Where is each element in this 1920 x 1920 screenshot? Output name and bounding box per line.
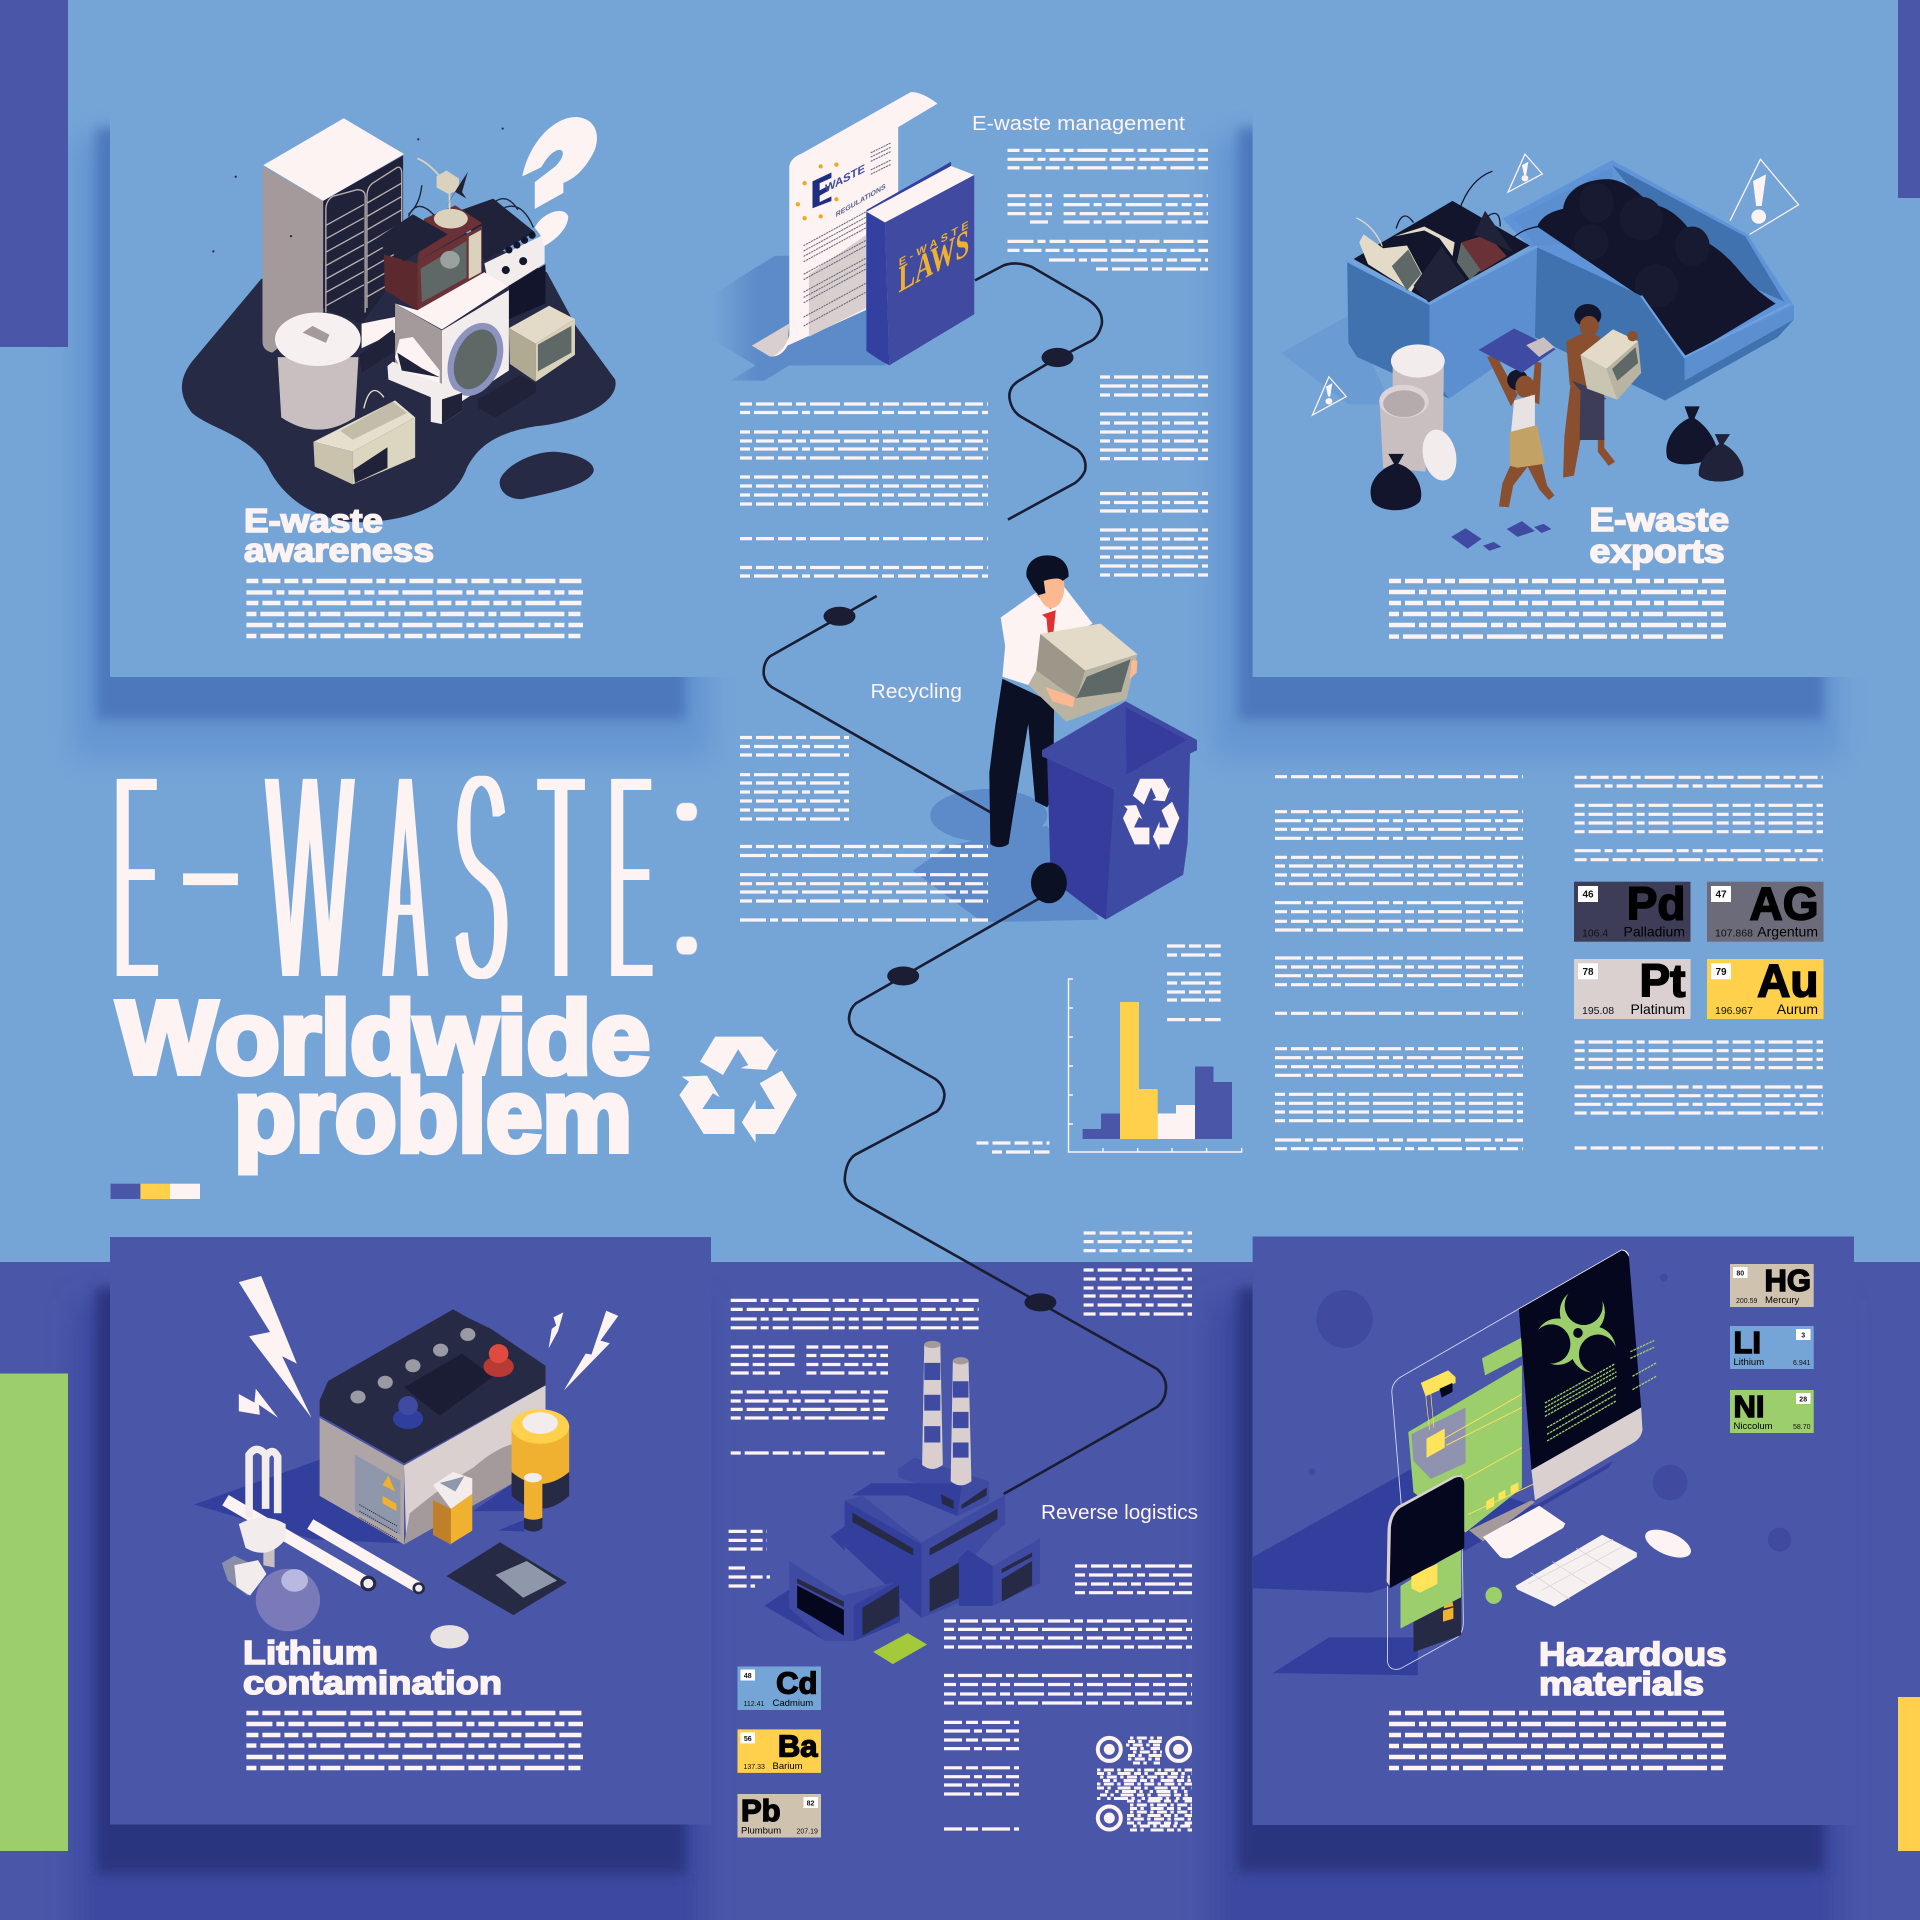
heading: Hazardous materials: Hazardous xyxy=(1539,1636,1727,1672)
element card: Cd: 48 xyxy=(744,1673,752,1680)
label: Reverse logistics: Reverse logistics xyxy=(1041,1502,1198,1524)
illustration: man recycling a monitor xyxy=(989,555,1197,920)
element card: Au: Au xyxy=(1757,955,1818,1007)
element card: Li: 3 xyxy=(1801,1332,1805,1340)
element card: Li: LI xyxy=(1734,1325,1761,1360)
label: LAWS on book: LAWS xyxy=(899,220,969,301)
panel: top left surface xyxy=(110,100,770,677)
text block xyxy=(1389,1713,1726,1768)
title: Worldwide problem: Worldwide xyxy=(117,980,650,1095)
connecting cable xyxy=(764,263,1166,1494)
element card: Pb xyxy=(738,1793,821,1838)
text blocks xyxy=(740,738,988,920)
panel: E-waste awareness xyxy=(182,117,616,636)
chart axes xyxy=(1068,979,1242,1152)
title: E-WASTE: : xyxy=(665,679,708,1028)
illustration: factory xyxy=(764,1341,1040,1664)
element card: Pb: 82 xyxy=(807,1800,814,1808)
heading: E-waste exports xyxy=(1590,501,1729,570)
title: E-WASTE: E xyxy=(114,707,158,1047)
element card: Ag: 47 xyxy=(1715,890,1727,901)
element card: Ni: 28 xyxy=(1799,1396,1807,1404)
icons: warning triangles xyxy=(1312,154,1799,415)
title: Worldwide problem xyxy=(117,980,650,1173)
dark lower background xyxy=(0,1262,1920,1920)
panel shadow: top left xyxy=(72,128,712,760)
title: Worldwide problem: problem xyxy=(234,1058,632,1173)
center light strip xyxy=(711,1230,1252,1262)
chart bars xyxy=(1083,1002,1232,1139)
QR code xyxy=(1097,1738,1192,1830)
element card: Hg: 80 xyxy=(1736,1270,1744,1278)
element card: Ag: Argentum xyxy=(1757,924,1818,940)
heading: E-waste awareness: awareness xyxy=(244,532,434,569)
heading: Hazardous materials: materials xyxy=(1539,1665,1704,1702)
panel shadow: top right xyxy=(1212,128,1842,760)
title: E-WASTE xyxy=(114,679,708,1048)
element card: Pd xyxy=(1574,877,1690,942)
title: E-WASTE: W xyxy=(266,707,353,1047)
element card: Ni: Niccolum xyxy=(1734,1421,1773,1432)
element card: Ba: 56 xyxy=(744,1736,752,1743)
label: WASTE on document: WASTE xyxy=(825,161,865,196)
element card: Cd: Cd xyxy=(776,1666,818,1700)
text block xyxy=(1389,581,1726,637)
icon: recycling symbol xyxy=(679,1037,797,1143)
heading: Lithium contamination: Lithium xyxy=(243,1634,378,1671)
element card: Pb: 207.19 xyxy=(796,1828,818,1836)
floor shadows under recycling figure xyxy=(913,789,1099,922)
figure: man with monitor xyxy=(1563,304,1641,478)
heading: Lithium contamination xyxy=(243,1634,502,1701)
illustration: regulations and law book xyxy=(711,92,974,381)
element card: Pb: Plumbum xyxy=(741,1826,781,1836)
panel: Lithium contamination xyxy=(194,1276,618,1768)
element card: Hg: HG xyxy=(1764,1263,1811,1298)
element card: Au: Aurum xyxy=(1777,1001,1818,1017)
panel: bottom left surface xyxy=(110,1237,711,1824)
element card: Pt: Platinum xyxy=(1631,1001,1685,1017)
heading: E-waste exports: exports xyxy=(1590,533,1724,570)
element card: Cd: Cadmium xyxy=(772,1698,813,1709)
side bar: top left xyxy=(0,0,68,347)
heading: E-waste awareness: E-waste xyxy=(244,502,383,539)
element card: Pb: Pb xyxy=(741,1793,781,1828)
label: E-waste management: E-waste management xyxy=(972,113,1185,135)
element card: Ni xyxy=(1730,1389,1814,1433)
side bar: green xyxy=(0,1374,68,1851)
element card: Ni: NI xyxy=(1734,1389,1764,1424)
panel: top right surface xyxy=(1253,100,1920,677)
title: E-WASTE: E xyxy=(609,707,652,1047)
element card: Li: Lithium xyxy=(1734,1357,1764,1368)
heading: Hazardous materials xyxy=(1539,1636,1727,1702)
panel: Recycling xyxy=(740,555,1197,920)
panel shadow: bottom right xyxy=(1212,1288,1842,1920)
element card: Li xyxy=(1730,1325,1814,1369)
title: E-WASTE: - xyxy=(177,685,244,1025)
colour swatch xyxy=(110,1184,200,1199)
text blocks xyxy=(740,150,1208,576)
element card: Ag xyxy=(1707,877,1824,942)
text block xyxy=(246,581,583,636)
element card: Pt: 78 xyxy=(1582,967,1594,978)
illustration: computer and phone xyxy=(1253,1249,1791,1675)
icon: biohazard xyxy=(1529,1277,1630,1377)
panel: Reverse logistics xyxy=(729,1233,1198,1838)
figure: girl with circuit board xyxy=(1479,329,1556,507)
element card: Pt xyxy=(1574,955,1690,1019)
element card: Pd: 46 xyxy=(1582,890,1594,901)
element card: Pd: 106.4 xyxy=(1582,928,1608,940)
element card: Pd: Palladium xyxy=(1624,924,1685,940)
element card: Ag: AG xyxy=(1750,877,1818,929)
title: E-WASTE: S xyxy=(454,708,508,1048)
element card: Hg: 200.59 xyxy=(1736,1298,1758,1305)
panel: bottom right surface xyxy=(1253,1236,1854,1825)
illustration: batteries and bulbs xyxy=(194,1276,618,1649)
chart: bar chart xyxy=(976,946,1242,1152)
element card: Au: 196.967 xyxy=(1715,1005,1753,1017)
panel: E-waste management xyxy=(711,92,1208,576)
element card: Cd: 112.41 xyxy=(744,1701,764,1708)
label: Recycling: Recycling xyxy=(870,681,962,703)
label: E-WASTE on book: E-WASTE xyxy=(899,219,969,269)
element card: Au xyxy=(1707,955,1824,1019)
side bar: yellow xyxy=(1898,1697,1920,1851)
panel: E-waste exports xyxy=(1281,154,1799,637)
element card: Au: 79 xyxy=(1715,967,1727,978)
heading: Lithium contamination: contamination xyxy=(243,1664,502,1701)
element card: Hg: Mercury xyxy=(1765,1295,1800,1306)
element card: Ba: Ba xyxy=(778,1728,818,1763)
element card: Ag: 107.868 xyxy=(1715,928,1753,940)
element card: Cd xyxy=(738,1666,821,1710)
element card: Pt: 195.08 xyxy=(1582,1005,1614,1017)
element card: Ba: Barium xyxy=(772,1761,803,1772)
element card: Ba: 137.33 xyxy=(744,1764,765,1771)
element card: Pd: Pd xyxy=(1627,877,1686,929)
right text column xyxy=(1275,777,1523,1149)
heading: E-waste awareness xyxy=(244,502,434,569)
panel shadow: bottom left xyxy=(76,1288,706,1920)
element card: Li: 6.941 xyxy=(1793,1360,1811,1367)
element card: Pt: Pt xyxy=(1640,955,1686,1007)
label: REGULATIONS on document: REGULATIONS xyxy=(836,182,886,219)
panel: Hazardous materials xyxy=(1253,1249,1814,1768)
chart captions xyxy=(976,946,1221,1152)
text blocks xyxy=(729,1233,1192,1829)
illustration: dumpsters and workers xyxy=(1281,154,1799,551)
text block xyxy=(246,1713,583,1768)
element card: Ba xyxy=(738,1728,821,1773)
illustration: e-waste pile xyxy=(182,117,616,522)
element card: Ni: 58.70 xyxy=(1793,1424,1811,1431)
element card: Hg xyxy=(1730,1263,1814,1307)
title: E-WASTE: T xyxy=(538,707,584,1047)
right text column 2 xyxy=(1575,777,1823,1148)
heading: E-waste exports: E-waste xyxy=(1590,501,1729,538)
side bar: top right xyxy=(1898,0,1920,198)
title: E-WASTE: A xyxy=(384,707,427,1047)
